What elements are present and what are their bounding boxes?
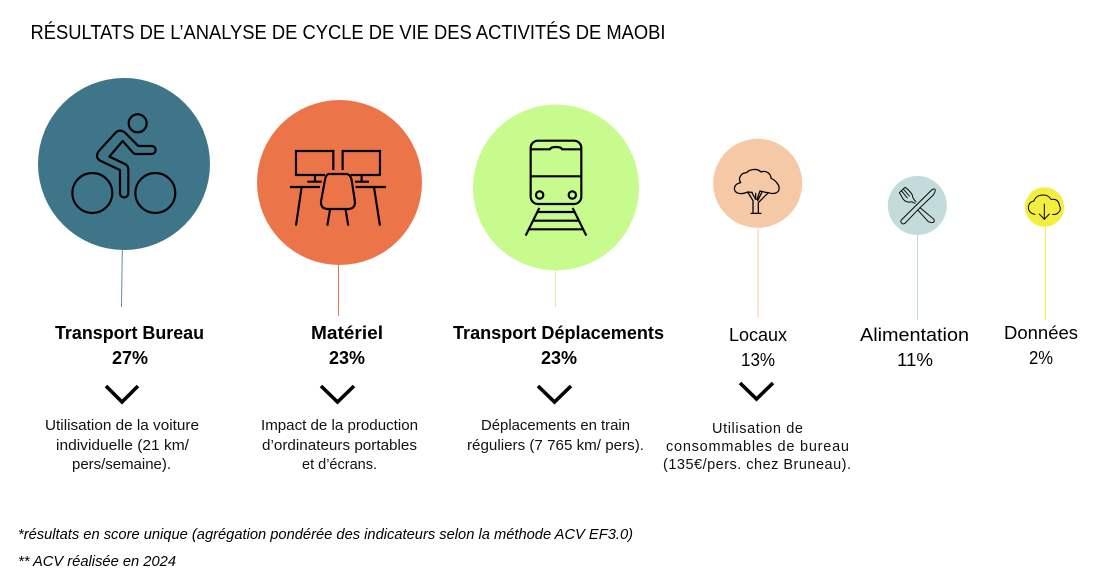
heading: Transport Bureau <box>55 322 204 343</box>
connector line <box>757 228 759 317</box>
description: réguliers (7 765 km/ pers). <box>467 438 644 454</box>
panel: matériel <box>257 100 422 473</box>
footnote: year: ** ACV réalisée en 2024 <box>18 554 176 570</box>
panel: données <box>1004 187 1078 368</box>
circle <box>38 78 210 250</box>
description <box>45 418 199 473</box>
description <box>663 421 851 473</box>
heading: Alimentation <box>860 324 969 345</box>
heading: Locaux <box>729 324 788 345</box>
percentage: 23% <box>329 347 365 368</box>
heading: Transport Déplacements <box>453 322 664 343</box>
percentage: 11% <box>897 349 933 370</box>
icon: cyclist <box>72 114 175 213</box>
icon: desk with monitors and chair <box>290 151 386 226</box>
description: Utilisation de la voiture <box>45 418 199 434</box>
description: pers/semaine). <box>72 457 171 473</box>
description <box>467 418 644 454</box>
description: Déplacements en train <box>481 418 630 434</box>
connector line <box>1044 227 1046 320</box>
heading: Matériel <box>311 322 383 343</box>
connector line <box>338 265 340 316</box>
description: individuelle (21 km/ <box>56 438 190 454</box>
percentage: 27% <box>112 347 148 368</box>
percentage: 13% <box>741 349 775 370</box>
circle <box>473 104 639 270</box>
chevron <box>740 383 773 399</box>
connector line <box>916 235 918 320</box>
chevron <box>321 386 354 402</box>
percentage: 2% <box>1029 347 1053 368</box>
description: consommables de bureau <box>666 439 849 455</box>
description: Impact de la production <box>261 418 418 434</box>
description: Utilisation de <box>712 421 803 437</box>
circle <box>1025 187 1064 227</box>
panel: alimentation <box>860 176 969 370</box>
panel: transport déplacements <box>453 104 664 454</box>
description: d’ordinateurs portables <box>262 438 417 454</box>
icon: train on tracks <box>526 141 586 236</box>
percentage: 23% <box>541 347 577 368</box>
title: RÉSULTATS DE L’ANALYSE DE CYCLE DE VIE DES ACTIVITÉS DE MAOBI <box>30 21 666 44</box>
circle <box>713 139 802 228</box>
circle <box>888 176 947 235</box>
icon: cloud download <box>1028 195 1060 219</box>
icon: fork and knife <box>899 187 935 224</box>
connector line <box>120 250 123 307</box>
description <box>261 418 418 473</box>
panel: transport bureau <box>38 78 210 473</box>
circle <box>257 100 422 265</box>
chevron <box>538 386 571 402</box>
description: (135€/pers. chez Bruneau). <box>663 457 851 473</box>
footnote: method: *résultats en score unique (agrégation pondérée des indicateurs selon la méthode ACV EF3.0) <box>18 527 633 543</box>
heading: Données <box>1004 322 1078 343</box>
connector line <box>554 270 556 307</box>
description: et d’écrans. <box>302 457 377 473</box>
panel: locaux <box>663 139 851 473</box>
chevron <box>106 386 138 402</box>
icon: tree <box>734 169 779 213</box>
